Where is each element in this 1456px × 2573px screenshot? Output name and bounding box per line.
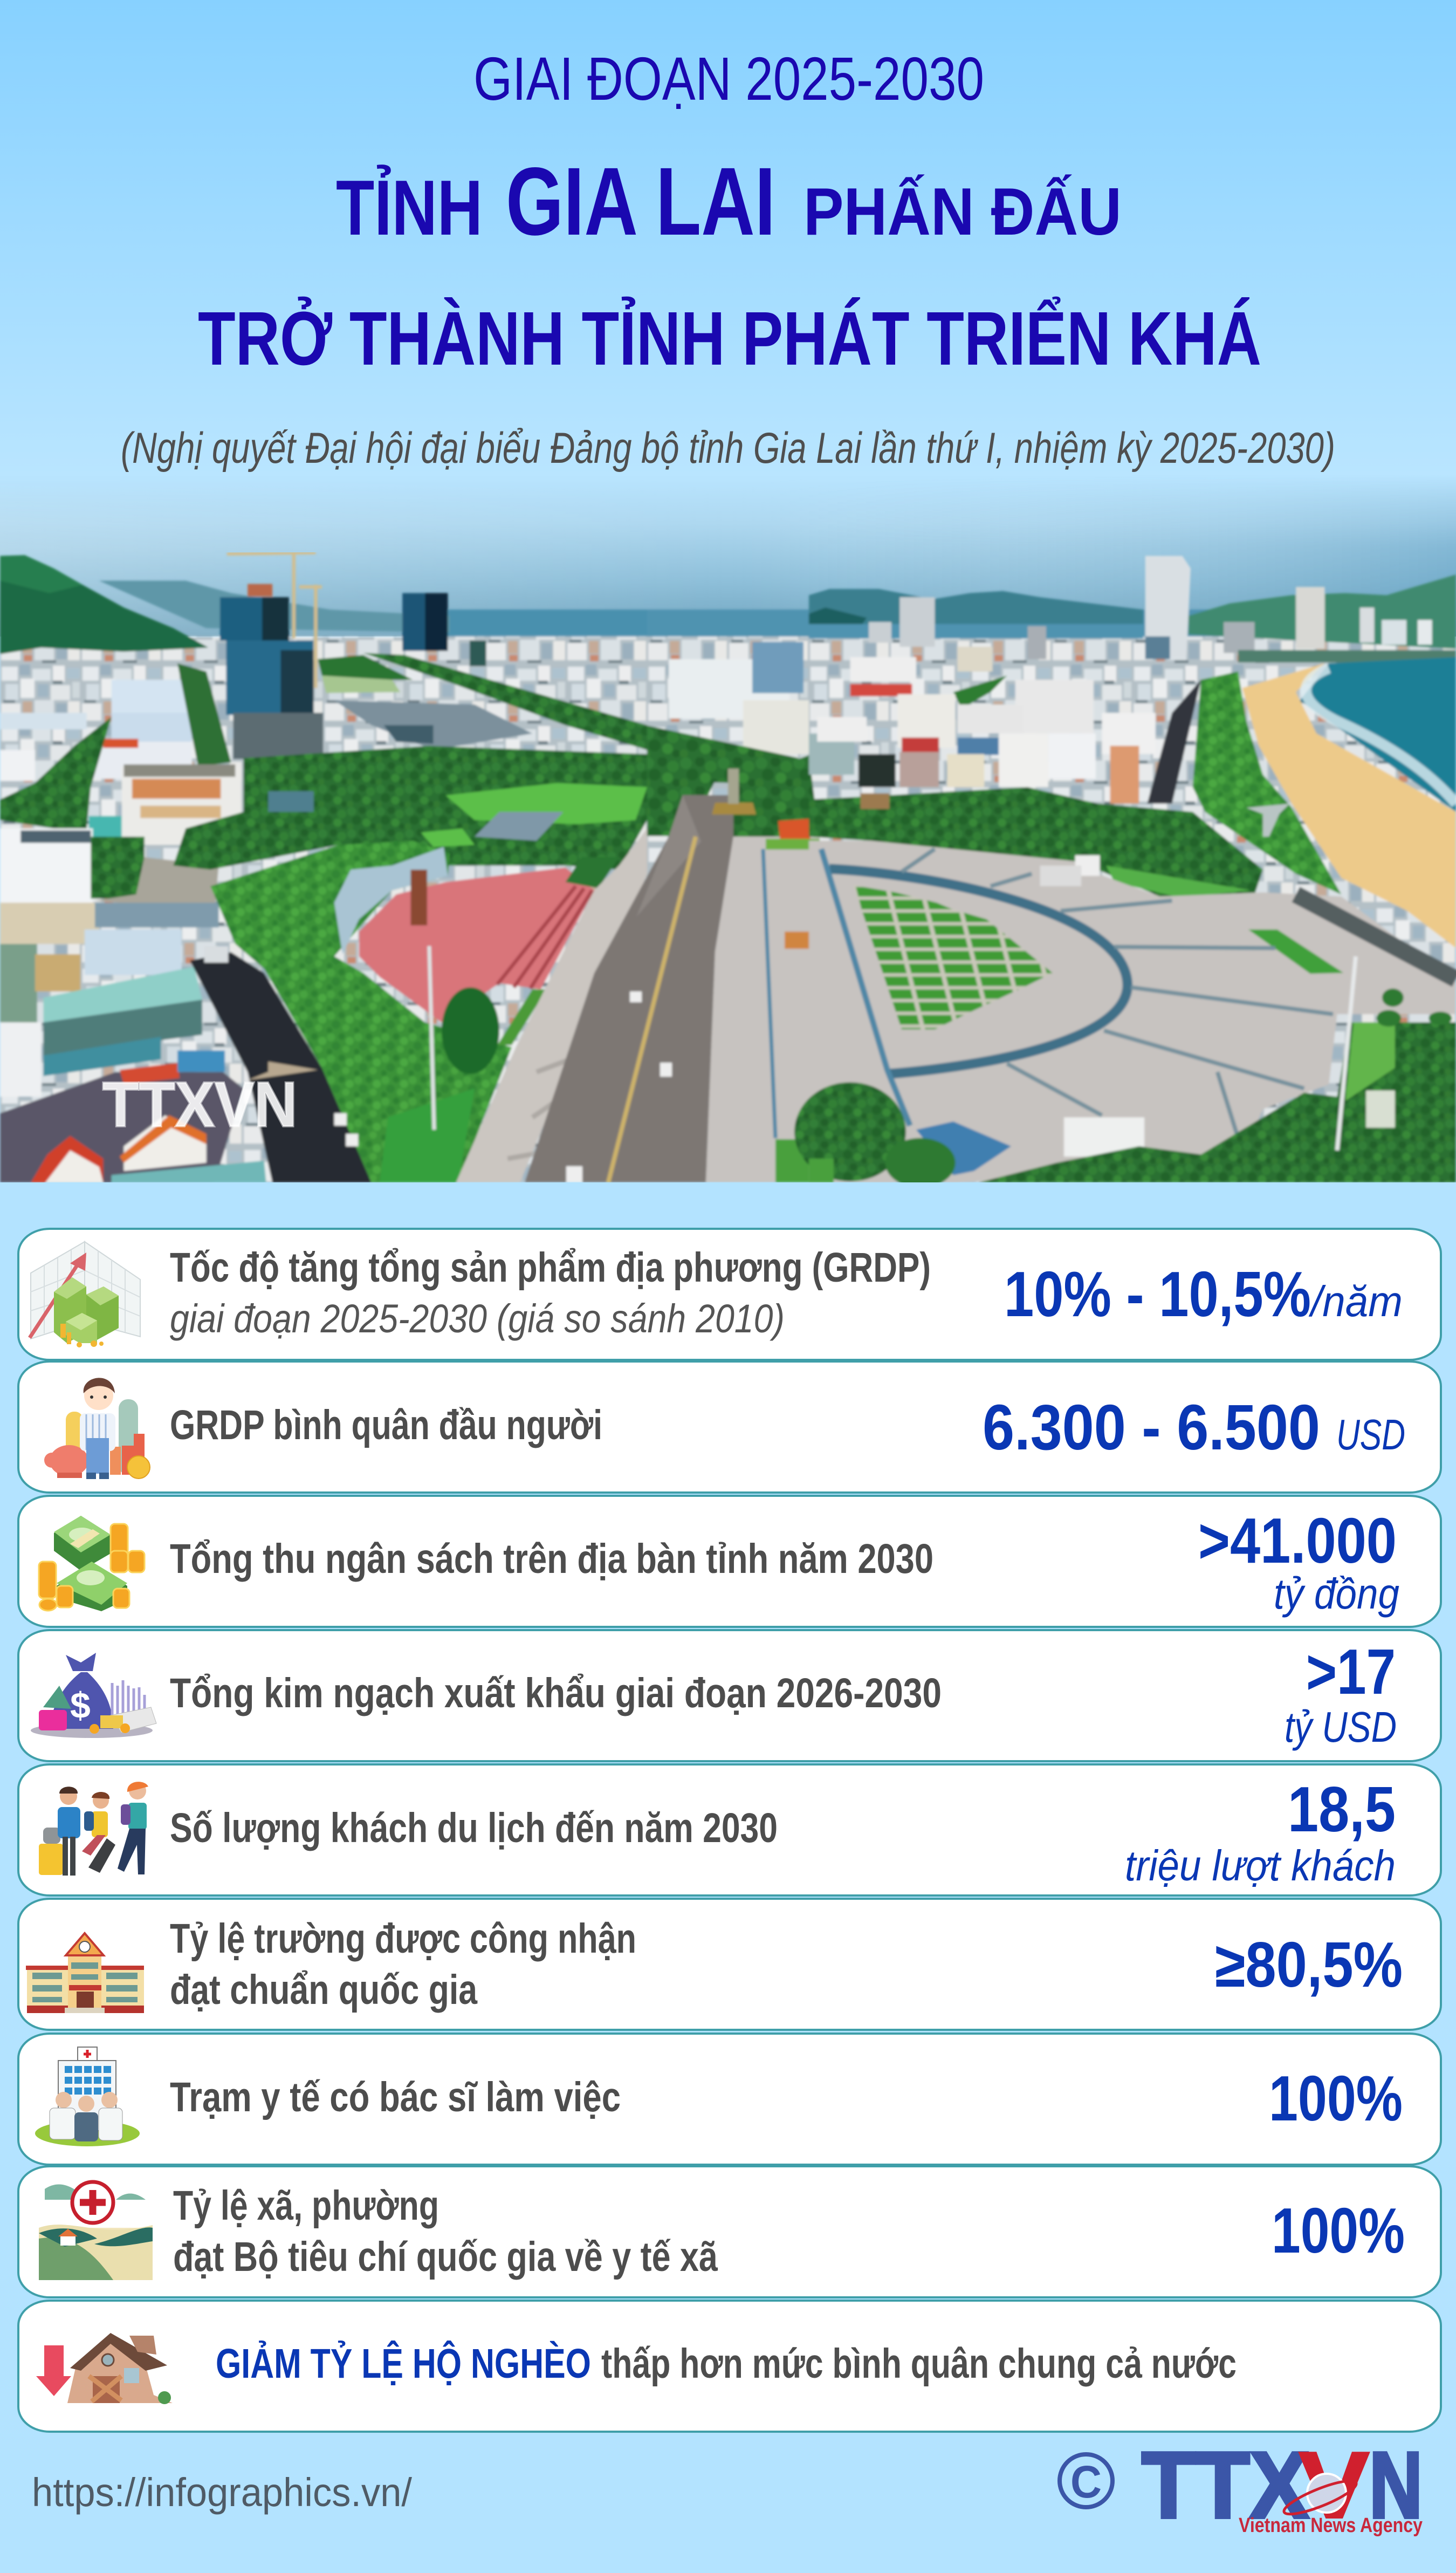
label: Tổng thu ngân sách trên địa bàn tỉnh năm 2030: [170, 1536, 933, 1582]
icon: school building: [26, 1933, 144, 2013]
label: two lines: [173, 2182, 718, 2280]
footer url: https://infographics.vn/: [32, 2470, 412, 2515]
unit: tỷ USD: [1285, 1703, 1397, 1751]
left part of the photo: [0, 552, 647, 1182]
logo: copyright and TTXVN: [1060, 2432, 1423, 2537]
value: >17: [1306, 1636, 1396, 1708]
value: ≥80,5%: [1215, 1929, 1403, 2001]
value: 100%: [1272, 2195, 1405, 2267]
header text block: [121, 45, 1335, 473]
panel: reduce poor households: [18, 2301, 1441, 2432]
logo: copyright and TTXVN: V: [1299, 2432, 1369, 2537]
value: 6.300 - 6.500: [983, 1392, 1320, 1463]
label: Trạm y tế có bác sĩ làm việc: [170, 2074, 621, 2120]
icon: money bag: $: [70, 1685, 91, 1726]
right part of the photo: [794, 556, 1456, 1188]
highlighted text: GIẢM TỶ LỆ HỘ NGHÈO: [216, 2340, 591, 2387]
icon: hospital and doctors: [35, 2047, 140, 2146]
label: two lines: đạt Bộ tiêu chí quốc gia về y tế xã: [173, 2234, 718, 2280]
photo: aerial view of coastal city and square: [0, 475, 1456, 1188]
value: 10% - 10,5%: [1004, 1258, 1311, 1330]
icon: banknotes and coins: [39, 1516, 145, 1611]
title line 1: PHẤN ĐẤU: [803, 174, 1122, 249]
label: two lines: Tỷ lệ trường được công nhận: [170, 1915, 636, 1962]
value: >41.000: [1198, 1505, 1397, 1577]
icon: rising money chart: [30, 1242, 140, 1347]
value: USD: [1336, 1411, 1405, 1459]
value: 18,5: [1288, 1774, 1396, 1845]
photo watermark: TTXVN: [102, 1069, 297, 1140]
title line 1: TỈNH: [336, 164, 483, 251]
label: Tổng kim ngạch xuất khẩu giai đoạn 2026-2030: [170, 1670, 942, 1716]
label: two lines: đạt chuẩn quốc gia: [170, 1967, 478, 2013]
period line: GIAI ĐOẠN 2025-2030: [473, 45, 984, 113]
unit: tỷ đồng: [1274, 1570, 1399, 1618]
panel: export turnover: [18, 1630, 1441, 1761]
label: Số lượng khách du lịch đến năm 2030: [170, 1805, 778, 1851]
label: thấp hơn mức bình quân chung cả nước: [601, 2341, 1237, 2387]
panel: doctors at health stations: [18, 2034, 1441, 2165]
logo: copyright and TTXVN: Vietnam News Agency: [1239, 2514, 1423, 2537]
icon: boy with piggy bank: [44, 1378, 150, 1479]
note: giai đoạn 2025-2030 (giá so sánh 2010): [170, 1296, 785, 1341]
value: 100%: [1269, 2063, 1403, 2134]
icon: money bag: [31, 1653, 156, 1738]
panel: national-standard schools: [18, 1899, 1441, 2030]
middle part of the photo: [525, 642, 831, 1182]
icon: three travellers: [39, 1782, 148, 1876]
icon: damaged house: [67, 2333, 173, 2404]
label: two lines: [170, 1915, 636, 2013]
panel: communes meeting health criteria: [18, 2166, 1441, 2297]
logo: copyright and TTXVN: C: [1070, 2456, 1102, 2507]
header gradient: [0, 0, 1456, 475]
label: two lines: Tỷ lệ xã, phường: [173, 2182, 439, 2229]
title line 1: GIA LAI: [506, 147, 775, 255]
icon: red cross over hills: [39, 2182, 153, 2280]
panel: budget revenue: [18, 1496, 1441, 1627]
panel: GRDP per capita: [18, 1361, 1441, 1493]
icon: down arrow: [36, 2345, 71, 2396]
title line 1: [336, 147, 1122, 255]
panel: tourists: [18, 1764, 1441, 1895]
logo: copyright and TTXVN: TTX: [1142, 2432, 1309, 2537]
panel: GRDP growth: [18, 1229, 1441, 1360]
value: /năm: [1308, 1277, 1403, 1325]
unit: triệu lượt khách: [1125, 1842, 1396, 1890]
label: GRDP bình quân đầu người: [170, 1402, 602, 1448]
logo: copyright and TTXVN: N: [1369, 2432, 1423, 2537]
label: Tốc độ tăng tổng sản phẩm địa phương (GRDP): [170, 1244, 931, 1291]
